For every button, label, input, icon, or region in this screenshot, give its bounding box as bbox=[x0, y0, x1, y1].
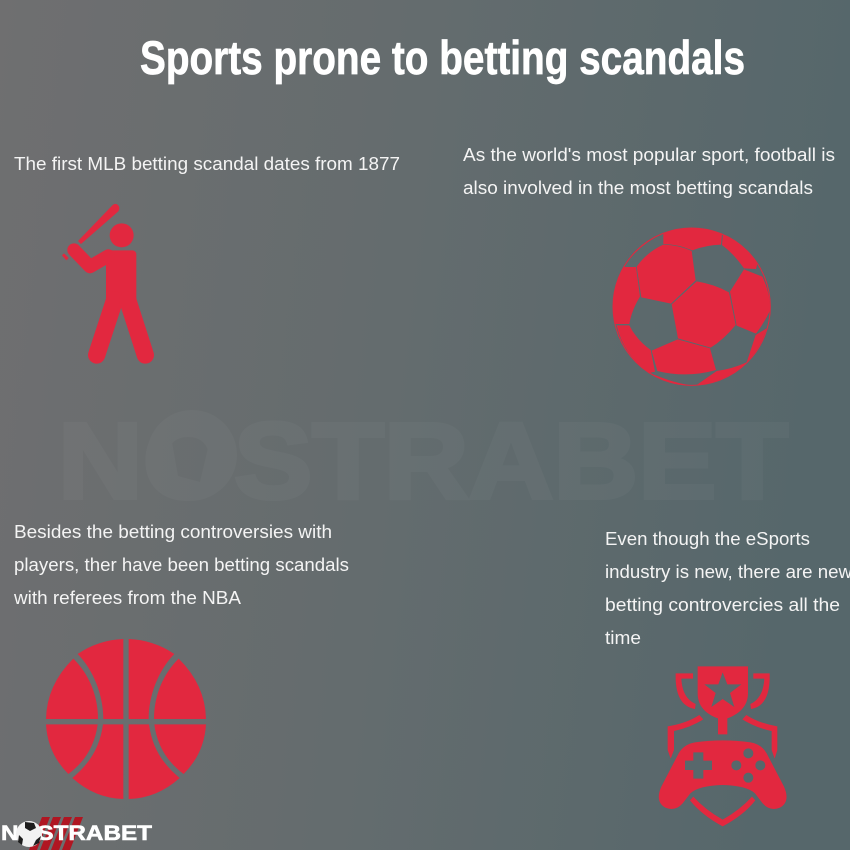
logo: Nostrabet bbox=[1, 817, 152, 850]
logo: Nostrabet: NOSTRABET bbox=[1, 822, 152, 845]
text block: basketball: with referees from the NBA bbox=[13, 587, 242, 608]
text block: esports bbox=[605, 528, 850, 648]
logo ball bbox=[16, 821, 42, 847]
shield base bbox=[690, 797, 755, 826]
trophy cup bbox=[698, 666, 748, 734]
text block: esports: Even though the eSports bbox=[605, 528, 810, 549]
text block: football bbox=[463, 144, 835, 198]
text block: baseball: The first MLB betting scandal dates from 1877 bbox=[14, 153, 400, 174]
text block: esports: industry is new, there are new bbox=[605, 561, 850, 582]
icon: soccer ball bbox=[613, 228, 770, 385]
text block: basketball bbox=[13, 521, 349, 608]
logo stripes bbox=[29, 817, 83, 850]
icon: baseball batter bbox=[62, 204, 145, 355]
trophy handles bbox=[676, 673, 696, 709]
icon: basketball bbox=[46, 639, 206, 799]
text block: basketball: players, ther have been betting scandals bbox=[14, 554, 349, 575]
game controller bbox=[659, 740, 787, 809]
text block: football: also involved in the most betting scandals bbox=[463, 177, 813, 198]
laurel wings bbox=[668, 715, 703, 759]
watermark: Nostrabet: NOSTRABET bbox=[58, 400, 788, 521]
text block: esports: betting controvercies all the bbox=[605, 594, 840, 615]
text block: esports: time bbox=[605, 627, 641, 648]
text block: basketball: Besides the betting controversies with bbox=[14, 521, 332, 542]
icon: esports trophy and controller bbox=[659, 666, 787, 826]
text block: football: As the world's most popular sport, football is bbox=[463, 144, 835, 165]
